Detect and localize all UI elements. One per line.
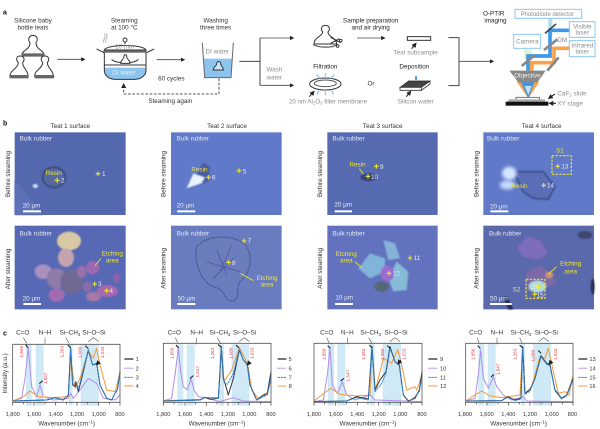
x axis title: Wavenumber (cm (340, 421, 389, 428)
beam splitter (545, 24, 556, 33)
image: teat 4 before steaming: 14 (547, 183, 555, 190)
band labels (320, 330, 408, 337)
label: CaF2 slide: 2 (569, 93, 572, 98)
legend: 14 (589, 366, 596, 372)
x axis title: −1 (238, 419, 244, 424)
label: wash water: water (266, 75, 282, 82)
peak pointers (26, 345, 99, 384)
image: teat 4 before steaming: S1 (556, 147, 564, 154)
label: filter membrane: 20 nm Al (289, 98, 313, 105)
curve 8 (163, 347, 271, 401)
peak values: 1,033 (249, 347, 254, 359)
x axis title: −1 (88, 419, 94, 424)
label: wash water: Wash (266, 67, 282, 74)
peak values: 1,089 (380, 348, 385, 360)
peak values: 1,547 (43, 372, 48, 384)
image: teat 4 after steaming: S2 (513, 286, 521, 293)
diagram: O-PTIR optical setup (506, 9, 595, 108)
image: teat 4 before steaming (483, 132, 594, 215)
tick labels: 1,400 (350, 412, 364, 418)
x axis title: ) (93, 420, 95, 427)
band labels: C=O (168, 330, 181, 337)
pointer: XY (549, 102, 556, 105)
tick labels (6, 412, 125, 418)
heading: teat 2 surface: Teat 2 surface (207, 123, 247, 130)
image: teat 4 after steaming: 50 μm (490, 295, 508, 302)
pointer: subsample (412, 43, 416, 49)
tick labels: 1,200 (221, 412, 235, 418)
tick labels: 800 (568, 412, 577, 418)
infrared laser box: laser (575, 48, 589, 55)
band labels: 3 (379, 332, 382, 337)
image: teat 1 after steaming (15, 226, 126, 309)
tick labels: 1,200 (523, 412, 537, 418)
x axis title: ) (545, 421, 547, 428)
peak values (19, 345, 105, 384)
peak pointers (478, 345, 552, 377)
band labels: C=O (16, 330, 29, 337)
heading: sample preparation: Sample preparation (343, 18, 398, 25)
photodiode detector box: Photodiode detector (521, 12, 574, 18)
panel a right: sample preparation and O-PTIR setup (289, 9, 595, 108)
band labels: Si–O–Si (233, 330, 256, 337)
image: teat 2 before steaming (171, 132, 282, 215)
panel letter c: c (3, 331, 7, 338)
peak values: 1,033 (402, 348, 407, 360)
label: filter membrane: filter membrane (323, 98, 368, 105)
curve 7 (163, 347, 271, 401)
peak values: 1,263 (513, 348, 518, 360)
visible laser box (569, 22, 595, 37)
tick labels (458, 412, 577, 418)
icon: silicon wafer with droplet (400, 75, 430, 90)
curve 15 (466, 347, 573, 401)
pointer: CaF2 (549, 94, 555, 98)
legend: 5 (289, 357, 292, 363)
band labels (16, 330, 106, 337)
panel letter a: a (3, 9, 7, 16)
image: teat 2 after steaming (171, 226, 282, 309)
leader lines (175, 338, 249, 344)
image: teat 1 after steaming: Etching (102, 251, 123, 258)
peak values (169, 347, 254, 377)
axis label: after steaming 2: After steaming (160, 247, 167, 289)
panel c: chart for teat 1 (2, 330, 139, 427)
curve 2 (13, 348, 120, 401)
arrow: steaming again loop (124, 78, 219, 94)
image: teat 4 after steaming: Etching (560, 261, 581, 268)
tick labels (156, 412, 276, 418)
panel b: microscope images first half (3, 121, 282, 215)
curve 3 (13, 348, 120, 401)
legend: 10 (440, 366, 446, 372)
x axis title: Wavenumber (cm (490, 421, 540, 428)
heading: sample preparation: and air drying (351, 25, 390, 32)
image: teat 4 after steaming: area (564, 268, 577, 275)
arrow: teats to steaming (57, 58, 85, 61)
peak values: 1,656 (19, 345, 24, 357)
image: teat 3 after steaming: 12 (393, 271, 401, 278)
band labels: Si–O–Si (384, 330, 408, 337)
band labels: 3 (529, 332, 532, 337)
icon: washing beaker: DI water (206, 48, 229, 55)
tick labels: 1,200 (372, 412, 386, 418)
icon: three bottle teats (9, 35, 54, 78)
axis label: before steaming 2: Before steaming (160, 150, 167, 197)
image: teat 4 before steaming: Bulk rubber (487, 136, 519, 143)
heading: filtration: Filtration (313, 64, 338, 71)
image: teat 2 after steaming: Bulk rubber (177, 231, 209, 238)
image: teat 3 before steaming: 20 μm (334, 201, 352, 208)
axis label: after steaming 1: After steaming (5, 248, 12, 289)
peak values: 1,089 (530, 349, 535, 361)
legend (278, 357, 292, 390)
tick labels: 800 (417, 412, 427, 418)
peak pointers (328, 345, 401, 381)
heading: washing three times: Washing (203, 18, 228, 25)
tick labels: 1,400 (199, 412, 213, 418)
peak values: 1,263 (361, 348, 366, 360)
icon: teat with scissors (313, 25, 342, 47)
curve 9 (314, 347, 422, 402)
curve 14 (466, 350, 573, 402)
image: teat 4 before steaming: Resin (511, 183, 528, 190)
image: teat 2 after steaming: area (261, 282, 274, 289)
legend: 6 (289, 366, 292, 372)
label: teat subsample: Teat subsample (394, 50, 438, 57)
heading: O-PTIR imaging: imaging (484, 17, 507, 24)
label: filter membrane: O (315, 98, 320, 105)
band labels: N–H (491, 330, 504, 337)
tick labels: 1,800 (6, 412, 20, 418)
tick labels: 800 (266, 412, 276, 418)
legend (578, 357, 596, 390)
label: CaF2 slide: slide (572, 90, 587, 97)
image: teat 3 before steaming: 10 (371, 174, 379, 181)
image: teat 3 before steaming: Resin (349, 162, 366, 169)
image: teat 2 after steaming: 50 μm (178, 295, 195, 302)
legend: 3 (136, 375, 139, 381)
peak values: 1,263 (60, 345, 65, 357)
peak values: 1,089 (78, 346, 83, 358)
image: teat 4 after steaming: 15 (537, 293, 544, 300)
curve 10 (314, 348, 422, 402)
legend: 9 (440, 357, 443, 363)
curve 12 (314, 348, 422, 401)
label: filter membrane: 3 (320, 101, 323, 106)
band labels (168, 330, 256, 337)
visible laser box: Visible (573, 24, 592, 31)
tick labels: 1,800 (307, 412, 321, 418)
icon: washing beaker (202, 43, 233, 78)
peak values (321, 348, 407, 381)
image: teat 4 after steaming: 16 (531, 284, 539, 291)
tick labels: 1,400 (501, 412, 515, 418)
camera box: Camera (516, 38, 539, 45)
image: teat 2 before steaming: 6 (212, 174, 216, 181)
frame and ticks (163, 343, 271, 406)
image: teat 2 before steaming: 20 μm (177, 203, 194, 210)
image: teat 1 after steaming: Bulk rubber (20, 231, 52, 238)
axis label: after steaming 4: After steaming (474, 247, 481, 289)
label: silicon wafer: Silicon wafer (398, 98, 434, 105)
band labels: Si–CH (360, 330, 379, 337)
visible laser box: laser (575, 30, 589, 37)
panel b: after steaming images second half (317, 226, 595, 309)
legend: 15 (589, 375, 596, 381)
image: teat 1 after steaming: 20 μm (23, 295, 40, 302)
image: teat 1 before steaming: 20 μm (23, 203, 40, 210)
curve 4 (13, 348, 120, 401)
image: teat 1 after steaming: area (106, 258, 119, 265)
axis label: before steaming 3: Before steaming (317, 150, 324, 197)
tick labels (307, 412, 427, 418)
label: XY stage: XY stage (557, 101, 583, 108)
image: teat 4 before steaming: 20 μm (490, 203, 508, 210)
image: teat 1 after steaming: 4 (109, 288, 113, 295)
heading: steaming at 100 C: at 100 °C (111, 24, 138, 32)
image: teat 3 after steaming: 11 (414, 255, 421, 262)
x axis title: ) (243, 420, 245, 427)
label: steaming again: Steaming again (148, 98, 193, 105)
tick labels: 1,000 (545, 412, 559, 418)
curve 1 (13, 348, 120, 401)
heading: steaming at 100 C: Steaming (111, 18, 138, 25)
image: teat 2 before steaming: Resin (191, 167, 208, 174)
tick labels: 1,400 (49, 412, 63, 418)
bands (328, 343, 401, 406)
peak values: 1,033 (100, 346, 105, 358)
tick labels: 1,600 (27, 412, 41, 418)
legend: 2 (136, 366, 139, 372)
axis label: before steaming 1: Before steaming (5, 150, 12, 197)
band labels: Si–CH (511, 330, 529, 337)
bands (177, 344, 249, 406)
band labels: Si–O–Si (82, 330, 106, 337)
curve 11 (314, 348, 422, 402)
frame and ticks (466, 343, 573, 406)
image: teat 4 before steaming: 13 (561, 163, 569, 170)
pointer: membrane (309, 91, 314, 97)
icon: filter membrane (310, 73, 341, 95)
heading: silicone baby bottle teats: bottle teats (18, 25, 48, 32)
tick labels: 1,000 (242, 412, 256, 418)
peak values (471, 348, 558, 375)
peak values: 1,089 (228, 347, 233, 359)
legend: 12 (440, 384, 446, 390)
XY stage (506, 99, 548, 106)
curve 6 (163, 348, 271, 402)
panel a left: sample steaming and washing (3, 9, 293, 105)
image: teat 2 after steaming: Etching (256, 275, 278, 282)
tick labels: 1,600 (329, 412, 343, 418)
legend (428, 357, 446, 390)
peak values: 1,263 (210, 347, 215, 359)
tick labels: 1,800 (156, 412, 170, 418)
icon: teat subsample strip (407, 37, 431, 40)
tick labels: 1,800 (458, 412, 472, 418)
image: teat 2 after steaming: 8 (232, 260, 236, 267)
bands (478, 343, 551, 406)
icon: steaming pot: 10 min (115, 44, 135, 51)
icon: steaming pot (97, 33, 154, 79)
slide (516, 97, 539, 101)
heading: teat 3 surface: Teat 3 surface (363, 123, 403, 130)
legend: 4 (136, 384, 139, 390)
y axis title: Intensity (a.u.) (2, 353, 9, 393)
image: teat 3 after steaming: 10 μm (335, 294, 353, 301)
peak values: 1,656 (321, 348, 326, 360)
mirrors (522, 39, 559, 71)
image: teat 2 after steaming: 7 (248, 238, 252, 245)
band labels (469, 330, 558, 337)
heading: silicone baby bottle teats: Silicone baby (14, 18, 52, 25)
objective lens: Objective (514, 72, 541, 79)
image: teat 4 after steaming: Bulk rubber (489, 231, 521, 238)
peak values: 1,656 (169, 347, 174, 359)
tick labels: 1,200 (70, 412, 84, 418)
image: teat 1 before steaming: 1 (102, 171, 106, 178)
label: DM: DM (557, 37, 567, 44)
curve 13 (466, 347, 573, 401)
arrow: steaming to washing (157, 58, 184, 61)
legend (124, 357, 139, 390)
leader lines (477, 338, 549, 344)
band labels: Si–O–Si (535, 330, 558, 337)
label: 60 cycles: 60 cycles (158, 75, 185, 82)
band labels: C=O (469, 330, 482, 337)
leader lines (327, 338, 400, 344)
infrared laser box: Infrared (571, 43, 593, 50)
image: teat 3 before steaming (327, 132, 438, 215)
image: teat 3 after steaming: area (340, 258, 353, 265)
legend: 16 (589, 384, 596, 390)
image: teat 1 before steaming: Resin (46, 170, 62, 177)
pointer: wafer (406, 91, 411, 97)
heading: teat 1 surface: Teat 1 surface (50, 123, 91, 130)
beam paths (517, 18, 569, 98)
label: filter membrane: 2 (313, 101, 316, 106)
heading: washing three times: three times (200, 25, 231, 32)
icon: steaming pot: DI water (112, 70, 136, 77)
legend: 8 (289, 384, 292, 390)
tick labels: 1,600 (480, 412, 494, 418)
panel c: chart for teat 4 (458, 330, 596, 428)
band labels: N–H (190, 330, 203, 337)
heading: O-PTIR imaging: O-PTIR (483, 10, 504, 17)
frame and ticks (13, 344, 120, 406)
leader lines (23, 338, 99, 344)
legend: 7 (289, 375, 292, 381)
peak values: 1,547 (495, 363, 500, 375)
heading: teat 4 surface: Teat 4 surface (522, 123, 562, 130)
frame and ticks (314, 343, 422, 406)
x axis title: Wavenumber (cm (38, 420, 88, 427)
arrow: to subsample (357, 37, 385, 39)
band labels: Si–CH (210, 330, 228, 337)
x axis title: −1 (540, 420, 546, 425)
peak pointers (176, 344, 250, 378)
bands (26, 344, 99, 406)
tick labels: 800 (115, 412, 125, 418)
axis label: after steaming 3: After steaming (317, 247, 324, 289)
image: teat 3 after steaming: Bulk rubber (332, 231, 365, 238)
tick labels: 1,600 (178, 412, 192, 418)
label: CaF2 slide: CaF (557, 90, 569, 97)
heading: deposition: Deposition (399, 64, 430, 71)
band labels: N–H (39, 330, 52, 337)
band labels: 3 (228, 332, 231, 337)
panel letter b: b (3, 121, 7, 128)
arrow: bracket to imaging (448, 38, 493, 86)
image: teat 3 before steaming: Bulk rubber (332, 136, 365, 143)
panel b: after steaming images first half (5, 226, 282, 309)
tick labels: 1,000 (393, 412, 407, 418)
panel c: chart for teat 2 (156, 330, 292, 427)
panel b: microscope images second half (317, 123, 594, 215)
band labels: N–H (341, 330, 354, 337)
x axis title: ) (394, 421, 396, 428)
image: teat 3 after steaming: Etching (336, 251, 357, 258)
arrow: branch to filtration and deposition (239, 38, 293, 85)
peak values: 1,656 (471, 348, 476, 360)
image: teat 1 after steaming: 3 (98, 281, 102, 288)
peak values: 1,033 (553, 348, 558, 360)
peak values: 1,547 (195, 365, 200, 377)
band labels: 3 (78, 332, 81, 337)
legend: 13 (589, 357, 596, 363)
image: teat 2 before steaming: Bulk rubber (177, 136, 209, 143)
axis label: before steaming 4: Before steaming (474, 150, 481, 197)
image: teat 4 after steaming (483, 226, 595, 309)
band labels: Si–CH (60, 330, 78, 337)
curve 5 (163, 347, 271, 401)
legend: 1 (136, 357, 139, 363)
peak values: 1,547 (346, 369, 351, 381)
tick labels: 1,000 (92, 412, 106, 418)
label: or: Or (367, 80, 375, 87)
image: teat 3 after steaming (327, 226, 438, 309)
image: teat 1 before steaming: Bulk rubber (20, 136, 52, 143)
panel c: chart for teat 3 (307, 330, 446, 428)
image: teat 1 before steaming (15, 132, 126, 215)
image: teat 3 before steaming: 9 (380, 164, 384, 171)
curve 16 (466, 348, 573, 401)
image: teat 2 before steaming: 5 (243, 168, 247, 175)
legend: 11 (440, 375, 446, 381)
band labels: C=O (320, 330, 333, 337)
x axis title: −1 (389, 420, 395, 425)
infrared laser box (569, 41, 595, 57)
x axis title: Wavenumber (cm (189, 420, 238, 427)
image: teat 1 before steaming: 2 (61, 178, 65, 185)
